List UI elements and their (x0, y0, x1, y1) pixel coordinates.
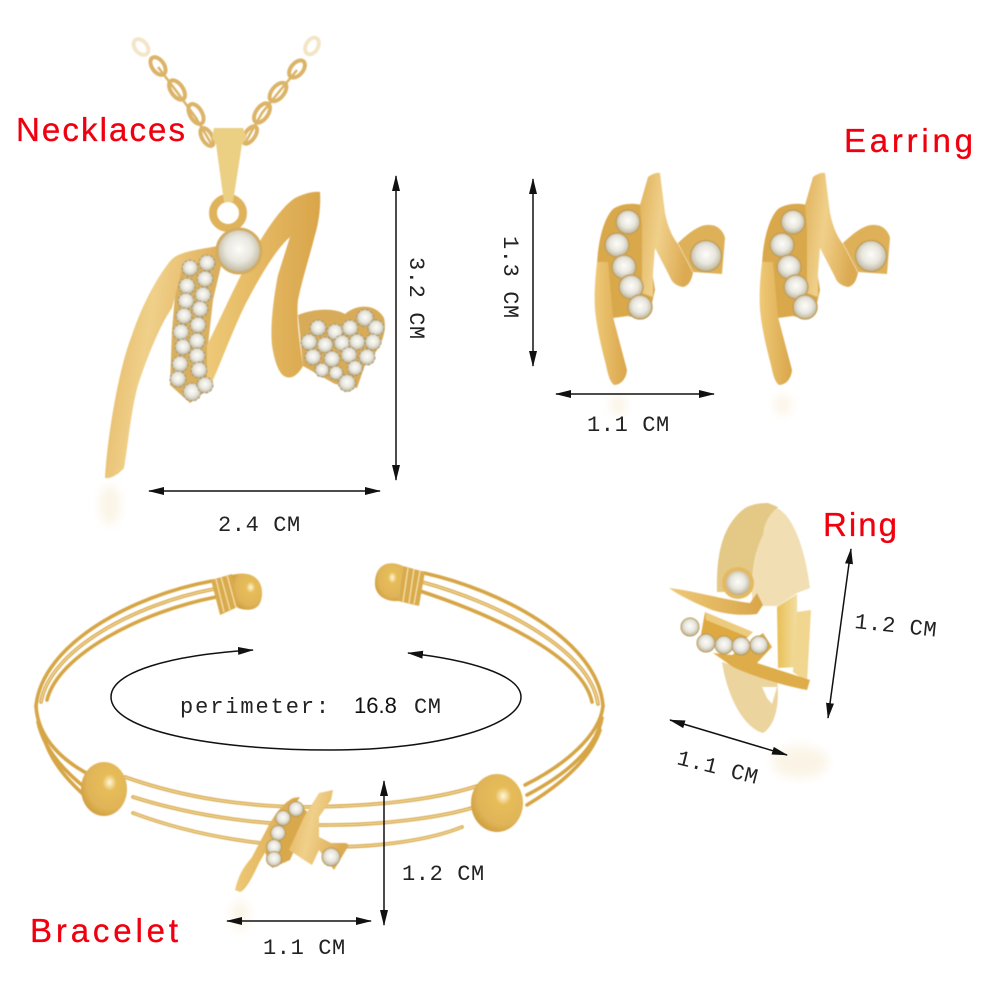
label: Ring: Ring (823, 506, 897, 543)
ring large stone (722, 567, 754, 599)
wire highlights (41, 582, 598, 847)
charm backing (264, 800, 310, 868)
dimension: 2.4 CM: 2.4 CM (218, 513, 301, 538)
charm right stroke (289, 790, 349, 870)
earring stones (605, 210, 722, 319)
end cap left (211, 574, 262, 615)
necklace chain (131, 35, 322, 148)
arrow: earring width (556, 393, 714, 395)
ring front band top (717, 503, 778, 592)
reflections (100, 395, 828, 930)
rhinestones left column (170, 255, 215, 401)
dimension: 1.1 CM ring: 1.1 CM (674, 747, 761, 791)
ring M top stroke (669, 588, 763, 615)
arrow: bracelet perimeter (111, 650, 521, 750)
pendant right stroke (207, 192, 320, 386)
bracelet (36, 563, 603, 892)
dimension: 1.1 CM bracelet: 1.1 CM (263, 936, 346, 961)
ring right strip (793, 610, 811, 682)
pendant heart base (298, 307, 385, 388)
ring M middle stroke (705, 612, 753, 637)
ring right shank (777, 594, 798, 668)
charm stones (266, 802, 340, 866)
dimension: perimeter: 16.8 (354, 693, 397, 718)
arrow: charm height (383, 781, 385, 925)
arrow: ring width (670, 720, 787, 755)
label: Necklaces: Necklaces (16, 111, 185, 148)
dimension: perimeter: perimeter: (180, 695, 331, 720)
arrow: ring height (828, 549, 851, 718)
arrow: charm width (227, 920, 371, 922)
dimension: 3.2 CM: 3.2 CM (403, 257, 428, 340)
dimension: 1.2 CM bracelet: 1.2 CM (402, 862, 485, 887)
dimension: perimeter: CM (414, 695, 442, 720)
dimension: 1.1 CM earring: 1.1 CM (587, 413, 670, 438)
pendant stone backing (170, 252, 222, 403)
bead right (471, 774, 523, 832)
ring stones row (681, 618, 768, 655)
earring backing (597, 204, 655, 319)
ring back band (752, 507, 810, 606)
earring right (760, 173, 890, 385)
ring M filler (700, 612, 748, 650)
earring centre stroke (640, 173, 693, 297)
charm left stroke (235, 797, 300, 892)
arrow: necklace width (149, 490, 380, 492)
earring heart (678, 225, 725, 274)
pendant left stroke (105, 246, 218, 478)
dimension: 1.3 CM: 1.3 CM (497, 236, 522, 319)
earring tail (595, 262, 627, 385)
arrow: earring height (532, 179, 534, 366)
end cap right (375, 563, 425, 606)
bead left (81, 762, 127, 816)
pendant bail (212, 128, 247, 202)
large round rhinestone (217, 229, 261, 273)
dimension: 1.2 CM ring: 1.2 CM (853, 610, 938, 644)
ring (669, 503, 811, 733)
pendant ring (213, 198, 243, 228)
label: Earring: Earring (844, 122, 973, 159)
earring left (595, 173, 725, 385)
ring M bottom stroke (713, 633, 810, 690)
necklace pendant M (105, 128, 385, 478)
bracelet M charm (235, 790, 349, 892)
arrow: necklace height (395, 176, 397, 480)
ring front band bottom (722, 662, 778, 733)
label: Bracelet: Bracelet (30, 912, 178, 949)
rhinestones heart (301, 310, 384, 392)
bracelet wires (36, 573, 603, 847)
